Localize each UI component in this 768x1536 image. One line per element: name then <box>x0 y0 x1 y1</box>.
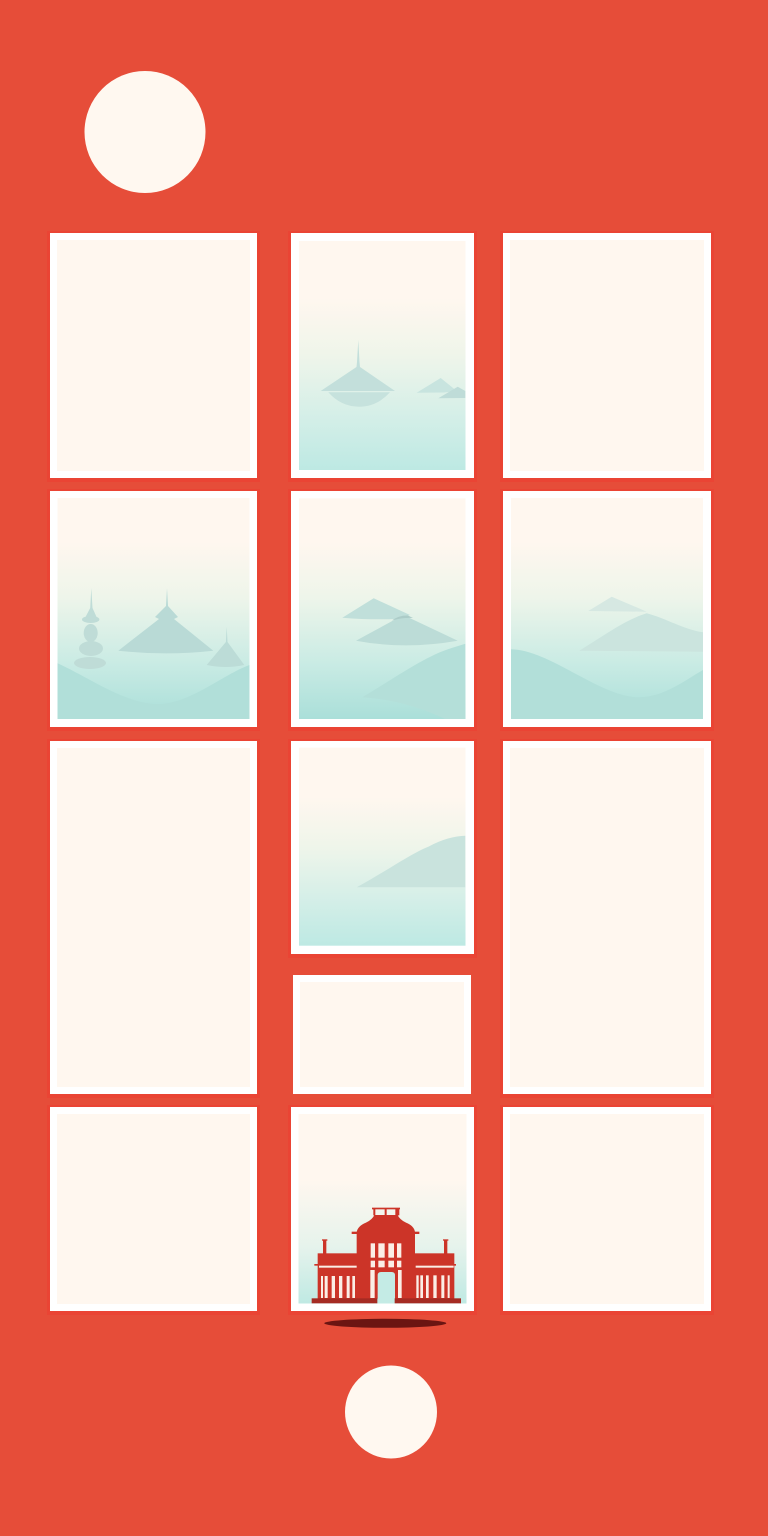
roof back <box>342 598 410 619</box>
panel: row 3 right blank <box>500 739 714 1098</box>
moon circle bottom <box>345 1366 437 1458</box>
panel: row 1 right blank <box>500 231 714 482</box>
panel: row 1 left blank <box>47 231 260 482</box>
panel: row 2 left with pagodas <box>47 489 260 731</box>
panel: row 3 centre with hill <box>288 739 477 958</box>
icon: red palace building <box>312 1208 461 1303</box>
panel: small centre blank <box>293 975 471 1094</box>
far peak <box>588 597 647 612</box>
stacked pagoda <box>74 588 106 669</box>
building shadow <box>324 1319 446 1328</box>
door <box>378 1272 395 1303</box>
panel: row 4 left blank <box>47 1105 260 1315</box>
large temple <box>118 588 213 653</box>
hills <box>511 649 703 719</box>
middle peak <box>579 613 703 652</box>
small temple <box>207 627 244 667</box>
sun circle top <box>84 71 206 193</box>
panel: row 2 right with hills <box>500 489 714 731</box>
hill <box>362 644 465 719</box>
roof front <box>356 615 458 645</box>
panel: row 4 centre with building <box>288 1105 477 1315</box>
panel: row 4 right blank <box>500 1105 714 1315</box>
panel: row 3 left blank <box>47 739 260 1098</box>
panel: row 1 centre with temple <box>288 231 477 482</box>
hills <box>58 663 250 719</box>
base <box>312 1298 377 1303</box>
panel: row 2 centre with roofs <box>288 489 477 731</box>
